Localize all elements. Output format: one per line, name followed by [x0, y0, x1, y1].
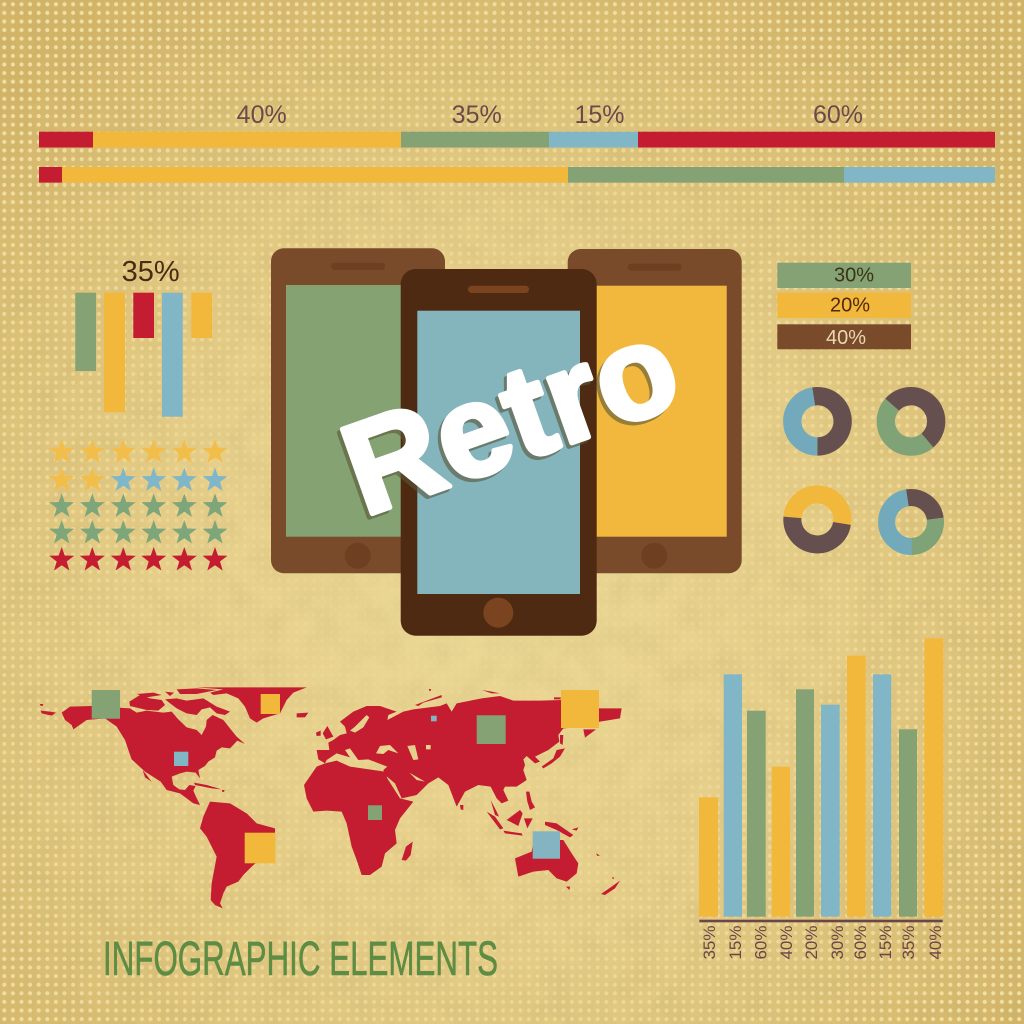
axis labels: 15% [876, 926, 895, 960]
phones with Retro headline [271, 248, 742, 636]
phone: centre blue [401, 269, 597, 636]
chart value label: 35% [122, 256, 180, 288]
bar labels: 40% [237, 101, 287, 129]
axis labels [700, 926, 945, 960]
vertical bars [699, 638, 943, 917]
map markers [92, 690, 599, 863]
star row 4 [49, 520, 228, 544]
axis labels: 30% [828, 926, 847, 960]
legend: 40%: 40% [826, 327, 866, 349]
segmented bar 2 [39, 167, 995, 183]
bar labels: 60% [813, 101, 863, 129]
small hanging bar chart [75, 256, 212, 417]
bar labels [237, 101, 863, 129]
bar labels: 35% [452, 101, 502, 129]
axis labels: 60% [752, 926, 770, 960]
axis labels: 40% [926, 926, 945, 960]
bar labels: 15% [574, 101, 625, 129]
bottom bar chart [699, 638, 945, 960]
axis labels: 60% [851, 926, 870, 960]
axis labels: 15% [726, 926, 745, 960]
phone: right yellow [568, 249, 742, 573]
world map [40, 687, 622, 908]
star row 3 [49, 494, 228, 517]
star row 5 [49, 547, 228, 570]
star row 2 [49, 468, 228, 491]
axis labels: 40% [777, 926, 796, 960]
star row 1 [49, 439, 228, 463]
legend bars [777, 263, 911, 349]
segmented bar 1 [39, 132, 995, 148]
donut 3 [792, 494, 842, 544]
axis line [699, 920, 943, 922]
legend: 20%: 20% [830, 295, 870, 317]
axis labels: 35% [700, 926, 719, 960]
title: INFOGRAPHIC ELEMENTS [103, 933, 498, 986]
star rating grid [49, 439, 228, 570]
headline: Retro: Retro [325, 291, 696, 543]
donut 2 [886, 396, 936, 447]
top progress bars [39, 101, 995, 183]
axis labels: 20% [802, 926, 821, 960]
map: Eurasia, Africa and Oceania [304, 689, 622, 895]
phone: left green [271, 248, 445, 573]
axis labels: 35% [899, 926, 918, 960]
map: Americas and Greenland [40, 687, 308, 908]
donut 1 [792, 396, 843, 447]
headline: Retro: Retro [322, 295, 693, 546]
legend: 30%: 30% [834, 264, 874, 286]
donut 4 [887, 498, 936, 547]
donut charts [792, 396, 936, 547]
